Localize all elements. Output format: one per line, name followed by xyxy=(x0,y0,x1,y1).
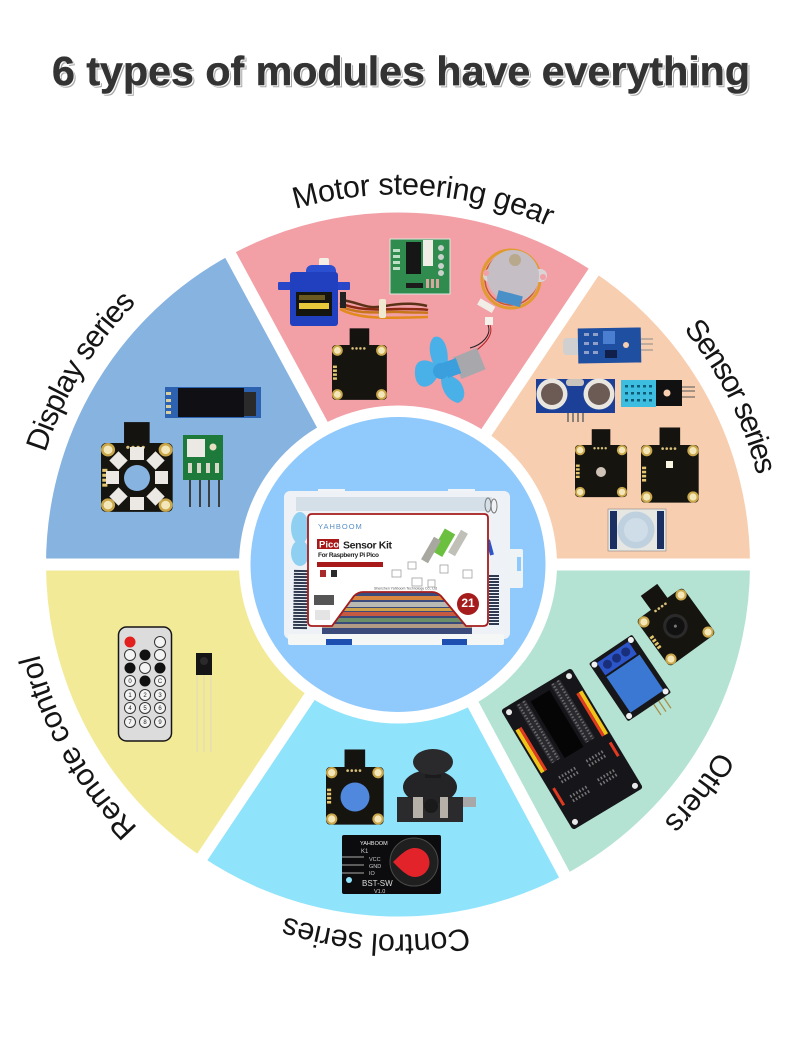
IR remote xyxy=(118,627,172,741)
label: Remote control: Remote control xyxy=(18,656,136,840)
label: Others: Others xyxy=(666,755,732,830)
panel: Control series sector xyxy=(199,564,567,922)
BST-SW switch module: GND xyxy=(369,864,381,870)
Pico expansion board xyxy=(501,668,643,830)
DHT11 sensor xyxy=(621,380,695,407)
BST-SW switch module: K1 xyxy=(361,849,369,855)
label: Control series: Control series xyxy=(282,918,468,956)
kit product card: Pico xyxy=(319,540,339,550)
title: 6 types of modules have everything xyxy=(52,48,750,94)
BST-SW switch module: IO xyxy=(369,871,376,877)
buzzer module xyxy=(626,573,716,667)
panel: Sensor series sector xyxy=(398,267,756,564)
IR remote: 2 xyxy=(143,693,147,699)
IR remote: 5 xyxy=(143,706,147,712)
joystick xyxy=(397,749,476,822)
key module xyxy=(326,749,384,825)
PIR sensor xyxy=(608,509,666,551)
panel: Motor steering gear sector xyxy=(228,207,597,564)
colour sensor module xyxy=(641,427,699,503)
rainbow jumper cables xyxy=(322,590,472,634)
panel: Others sector xyxy=(398,564,756,880)
IR remote: 6 xyxy=(158,706,162,712)
BST-SW switch module: V1.0 xyxy=(374,889,385,895)
kit box xyxy=(284,489,523,645)
RGB LED board xyxy=(183,435,223,507)
light sensor module xyxy=(575,429,627,497)
kit product card: YAHBOOM xyxy=(318,522,363,531)
label: Sensor series: Sensor series xyxy=(686,320,772,474)
motor module board xyxy=(332,328,387,400)
kit product card: Sensor Kit xyxy=(343,540,392,552)
sound sensor xyxy=(563,327,653,364)
label: Motor steering gear: Motor steering gear xyxy=(292,174,554,224)
kit product card xyxy=(308,514,488,626)
IR remote: 9 xyxy=(158,720,162,726)
IR remote: 0 xyxy=(128,679,132,685)
panel: Remote control sector xyxy=(40,564,398,862)
stepper driver board xyxy=(390,239,450,294)
fan motor xyxy=(415,337,486,403)
stepper motor xyxy=(470,250,547,352)
IR remote: C xyxy=(158,679,163,685)
relay module xyxy=(589,634,678,732)
kit product card: For Raspberry Pi Pico xyxy=(318,552,379,559)
IR remote: 1 xyxy=(128,693,132,699)
IR remote: 8 xyxy=(143,720,147,726)
OLED display xyxy=(165,387,261,418)
BST-SW switch module: VCC xyxy=(369,857,381,863)
BST-SW switch module xyxy=(342,835,441,895)
kit product card: 21 xyxy=(461,596,475,610)
BST-SW switch module: YAHBOOM xyxy=(360,841,388,847)
panel: centre circle with kit xyxy=(239,406,557,724)
ultrasonic sensor xyxy=(536,378,615,422)
IR remote: 7 xyxy=(128,720,132,726)
servo motor xyxy=(278,258,428,326)
kit product card: Shenzhen Yahboom Technology Co., Ltd xyxy=(374,586,437,590)
IR receiver xyxy=(196,653,212,752)
BST-SW switch module: BST-SW xyxy=(362,879,393,888)
panel: Display series sector xyxy=(40,250,398,564)
IR remote: 3 xyxy=(158,693,162,699)
IR remote: 4 xyxy=(128,706,132,712)
label: Display series: Display series xyxy=(26,294,134,450)
RGB LED ring module xyxy=(101,422,173,512)
